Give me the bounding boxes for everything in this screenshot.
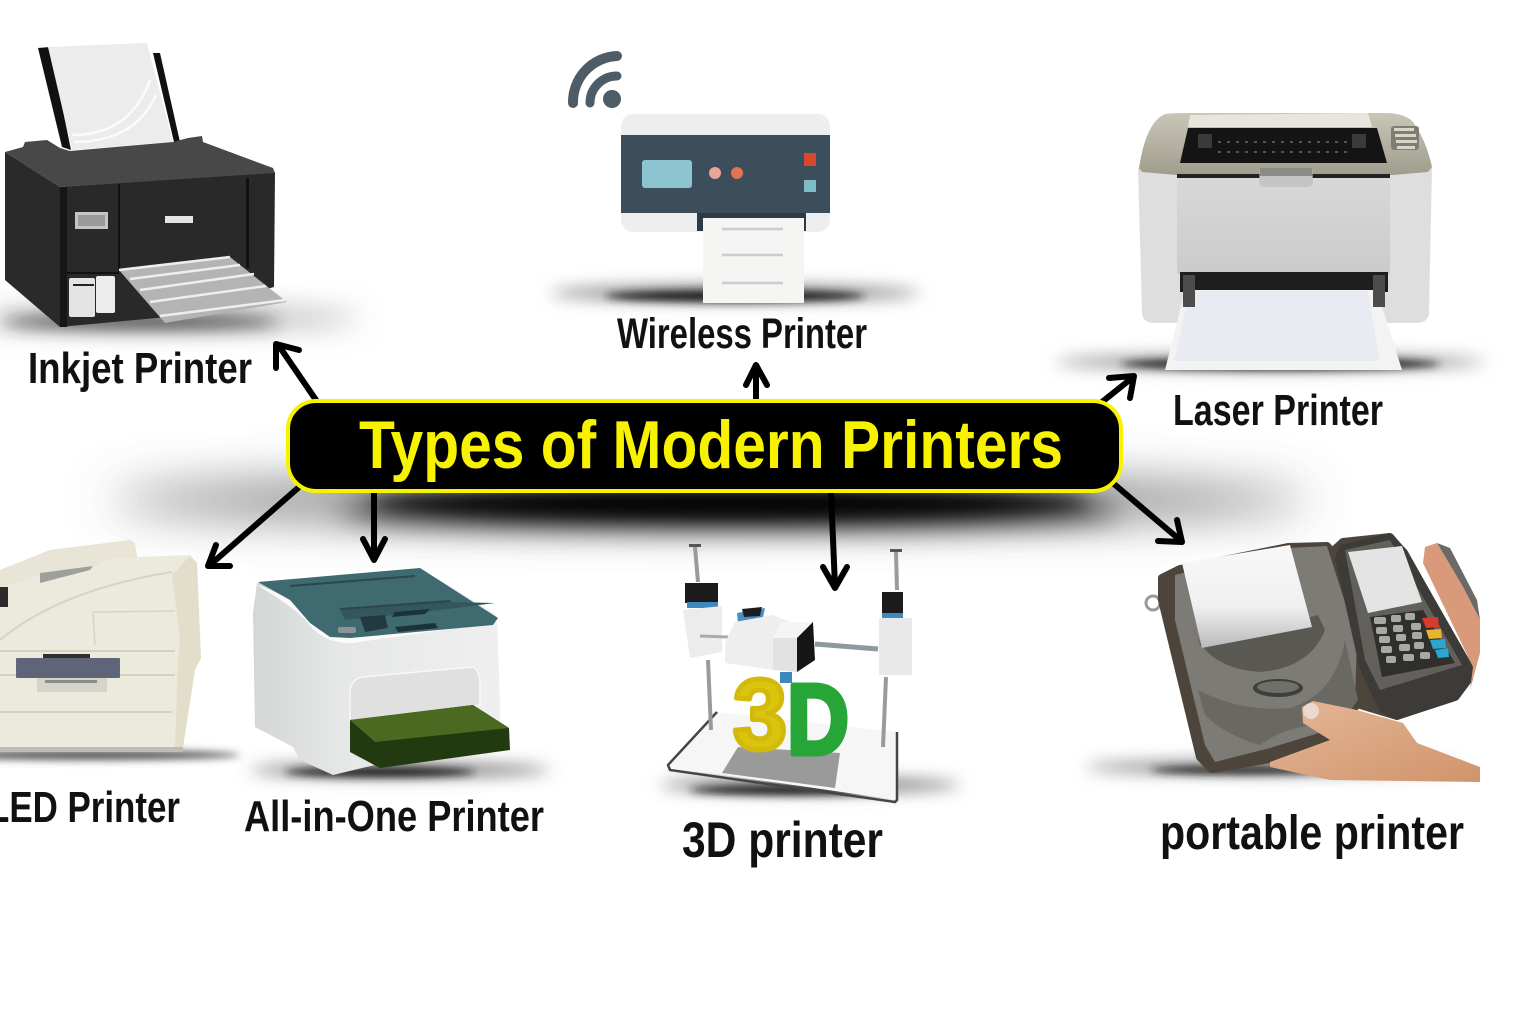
- panel: wireless printer: [550, 56, 920, 303]
- label: portable printer: portable printer: [1160, 807, 1464, 860]
- panel: portable printer: [1085, 533, 1480, 782]
- label: Wireless Printer: Wireless Printer: [617, 310, 867, 358]
- icon: hand: [1270, 543, 1480, 782]
- icon: 3D letters: D: [787, 664, 849, 776]
- arrow: to 3D: [823, 492, 847, 588]
- title banner: [288, 401, 1121, 491]
- central banner shadow: [110, 480, 1310, 525]
- icon: all-in-one body: [253, 568, 510, 775]
- icon: 3D printer base: [668, 712, 897, 802]
- arrow: to LED: [208, 488, 298, 566]
- icon: wireless printer body: [621, 114, 830, 303]
- panel: inkjet printer: [0, 43, 360, 328]
- icon: 3D letters: [733, 659, 849, 776]
- label: Inkjet Printer: Inkjet Printer: [28, 344, 252, 393]
- arrow: to wireless: [746, 365, 767, 400]
- arrow: to inkjet: [276, 344, 316, 400]
- arrow: to portable: [1114, 484, 1182, 542]
- icon: key ring: [1146, 596, 1160, 610]
- arrow: to all-in-one: [363, 490, 385, 560]
- panel: all-in-one printer: [250, 568, 550, 777]
- icon: inkjet paper: [38, 43, 180, 150]
- icon: portable printer body: [1162, 533, 1473, 769]
- panel: 3D printer: [660, 544, 960, 802]
- arrow: to laser: [1102, 376, 1134, 402]
- label: Laser Printer: Laser Printer: [1173, 386, 1383, 435]
- arrows: [208, 344, 1182, 588]
- icon: laser printer body: [1138, 113, 1432, 370]
- icon: 3D letters: 3: [733, 659, 787, 771]
- icon: wifi: [573, 56, 621, 108]
- title: Types of Modern Printers: [359, 407, 1063, 483]
- label: All-in-One Printer: All-in-One Printer: [244, 792, 544, 841]
- label: 3D printer: 3D printer: [682, 812, 883, 868]
- icon: LED printer body: [0, 540, 201, 752]
- panel: laser printer: [1055, 113, 1485, 370]
- icon: inkjet body: [5, 136, 287, 327]
- panel: LED printer: [0, 540, 240, 760]
- icon: 3D printer frame: [683, 544, 912, 747]
